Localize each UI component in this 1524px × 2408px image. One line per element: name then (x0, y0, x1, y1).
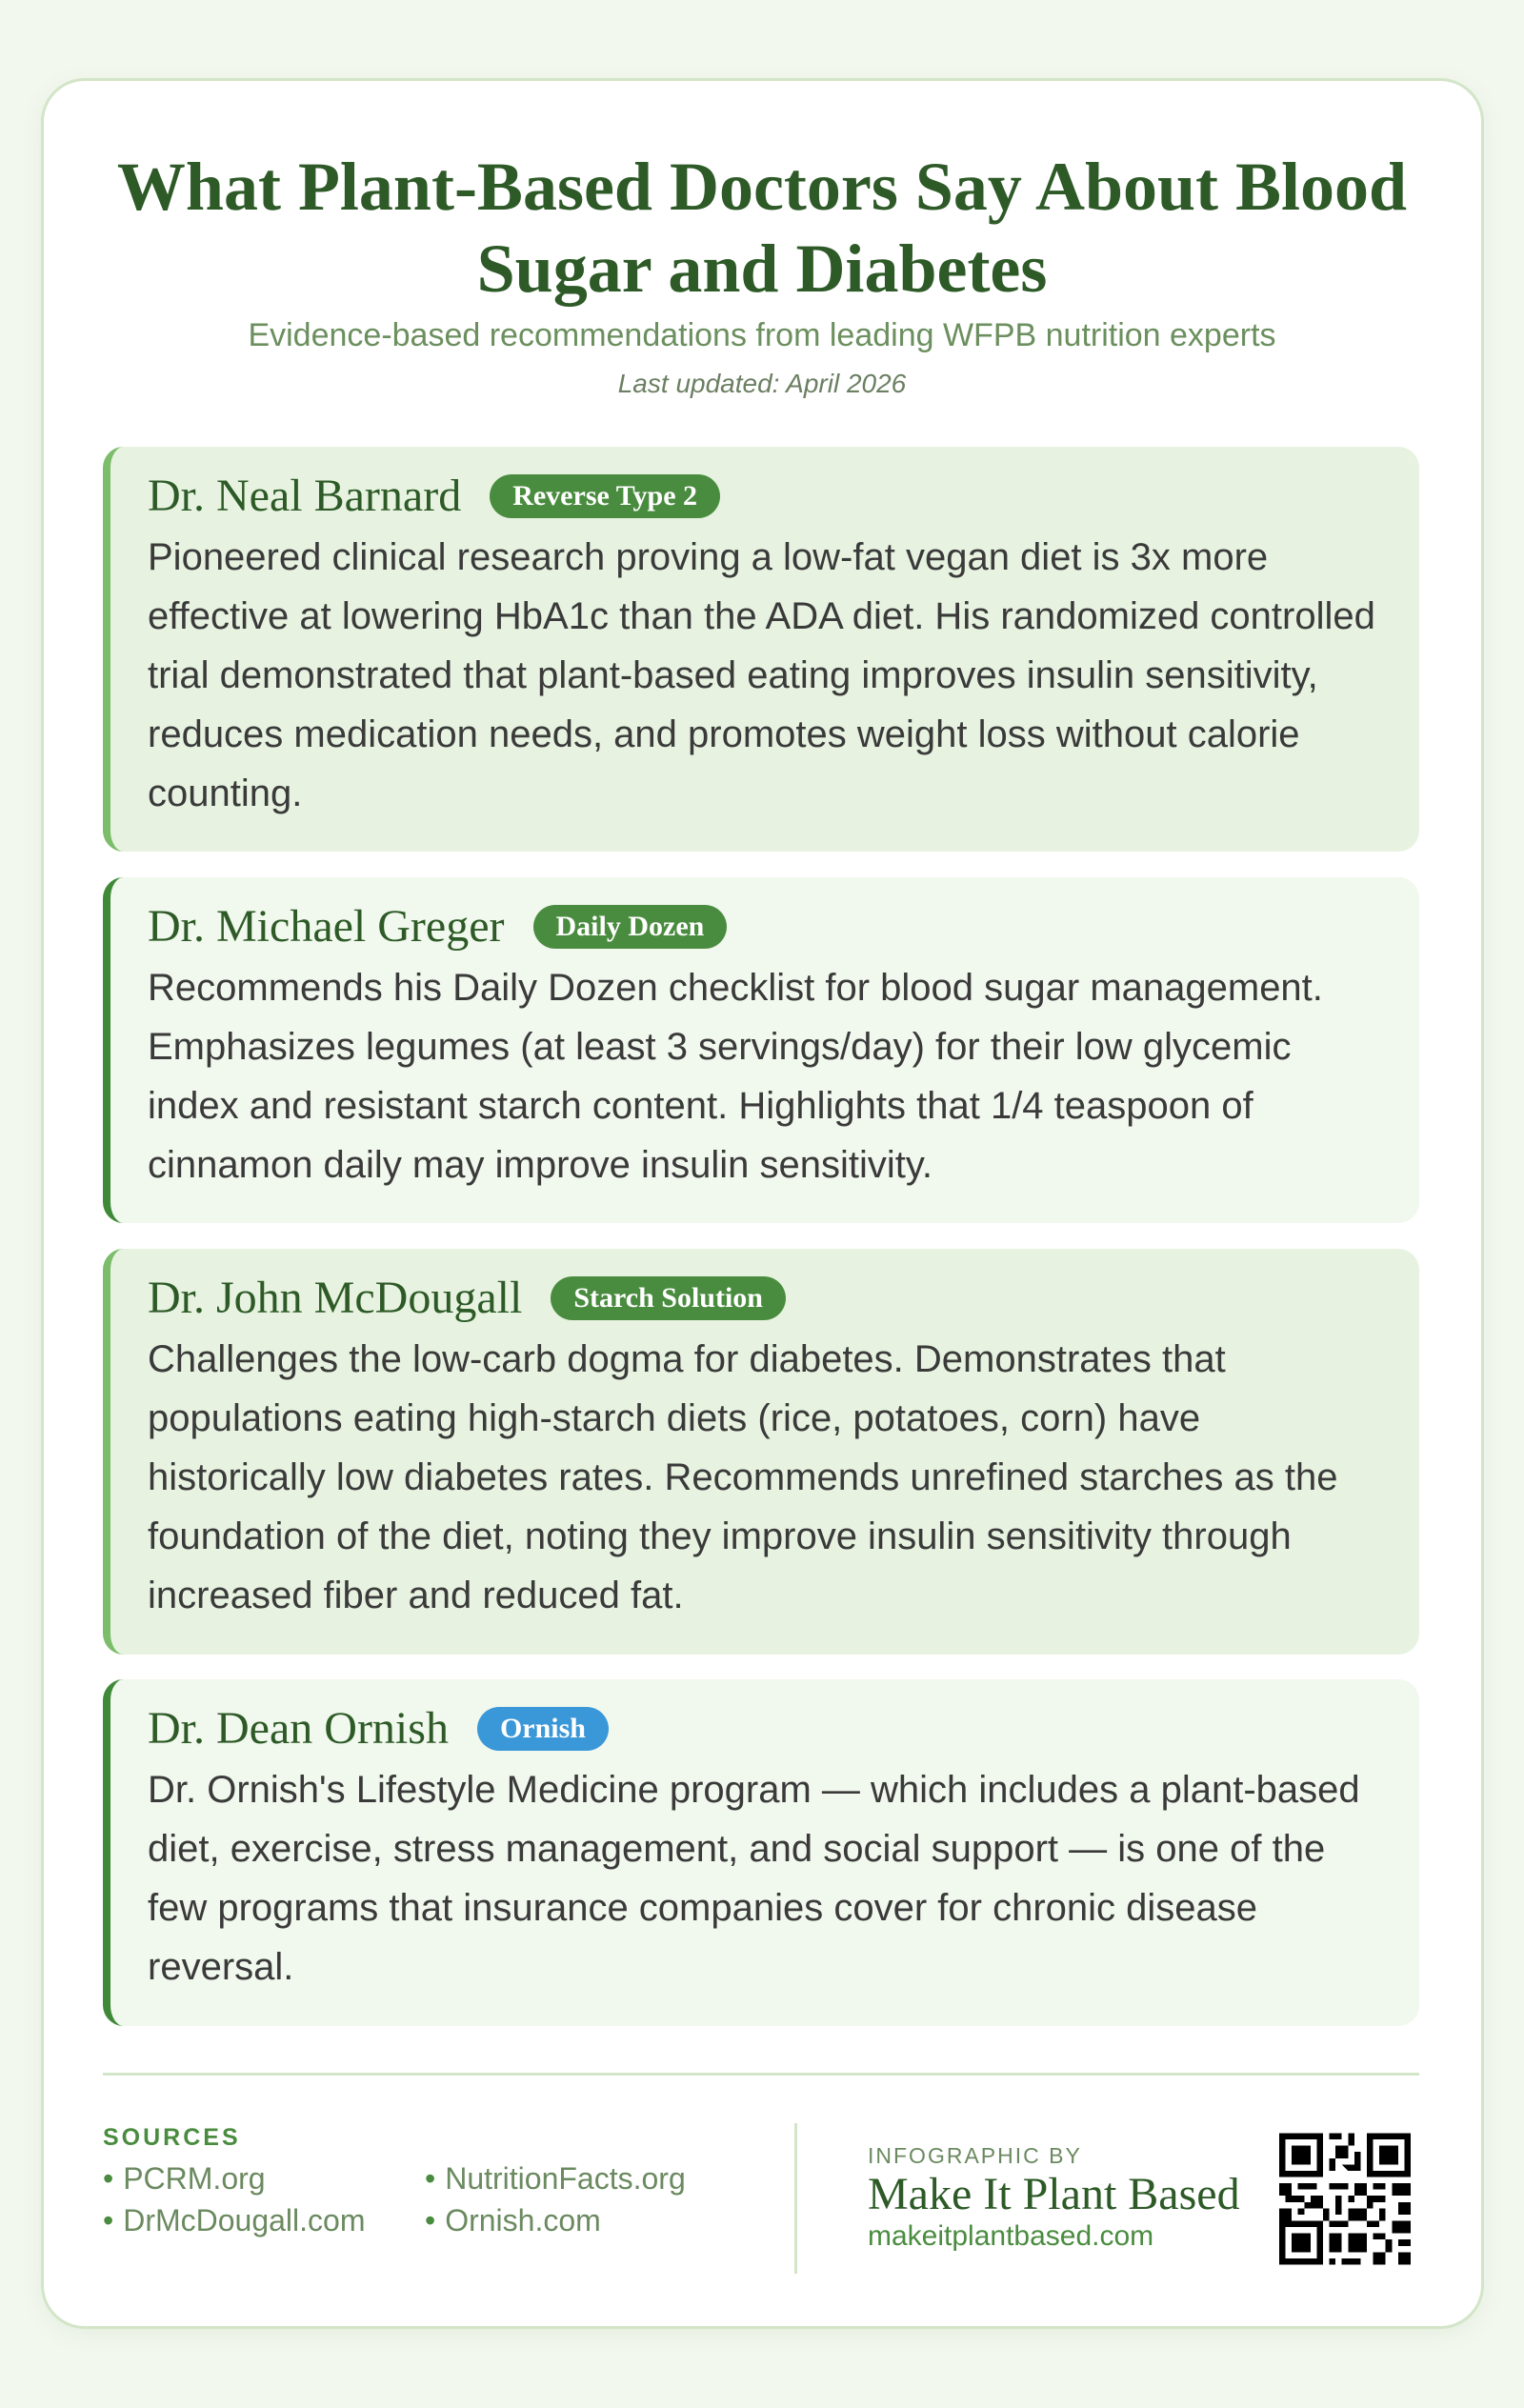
sources list: • Ornish.com (425, 2203, 601, 2237)
credit: Make It Plant Based (868, 2169, 1240, 2219)
name: Ornish: Ornish (500, 1713, 586, 1744)
panel: Dean Ornish (103, 1679, 1419, 2026)
sources list: • DrMcDougall.com (103, 2203, 365, 2237)
icon: QR code (1279, 2134, 1411, 2265)
credit: INFOGRAPHIC BY (868, 2143, 1082, 2168)
text: Barnard: Pioneered clinical research proving a low-fat vegan diet is 3x more effective at lowering HbA1c than the ADA diet. His randomized controlled trial demonstrated that plant-based eating improves insulin sensitivity, reduces medication needs, and promotes weight loss without calorie counting. (148, 536, 1375, 814)
sources list: • PCRM.org (103, 2161, 266, 2196)
text: McDougall: Challenges the low-carb dogma for diabetes. Demonstrates that populations eating high-starch diets (rice, potatoes, corn) have historically low diabetes rates. Recommends unrefined starches as the foundation of the diet, noting they improve insulin sensitivity through increased fiber and reduced fat. (148, 1338, 1337, 1616)
sources heading: SOURCES (103, 2124, 241, 2151)
sources list: • NutritionFacts.org (425, 2161, 686, 2196)
name: McDougall (148, 1273, 786, 1323)
panel: John McDougall (103, 1249, 1419, 1655)
title: Sugar and Diabetes (477, 231, 1047, 307)
credit (868, 2143, 1240, 2252)
credit: makeitplantbased.com (868, 2220, 1153, 2252)
name: Barnard (148, 471, 720, 521)
sources list (103, 2161, 686, 2237)
date: Last updated: April 2026 (618, 369, 906, 398)
name: Greger (148, 901, 727, 952)
text: Ornish: Dr. Ornish's Lifestyle Medicine program — which includes a plant-based diet, exercise, stress management, and social support — is one of the few programs that insurance companies cover for chronic disease reversal. (148, 1769, 1360, 1988)
name: Greger: Dr. Michael Greger (148, 901, 505, 952)
title (117, 149, 1407, 307)
name: McDougall: Dr. John McDougall (148, 1273, 522, 1323)
text: Greger: Recommends his Daily Dozen checklist for blood sugar management. Emphasizes legumes (at least 3 servings/day) for their low glycemic index and resistant starch content. Highlights that 1/4 teaspoon of cinnamon daily may improve insulin sensitivity. (148, 967, 1323, 1186)
name: Barnard: Reverse Type 2 (512, 480, 697, 512)
title: What Plant-Based Doctors Say About Blood (117, 149, 1407, 225)
panel: Neal Barnard (103, 447, 1419, 852)
name: Ornish (148, 1703, 609, 1754)
name: Greger: Daily Dozen (556, 911, 704, 942)
name: McDougall: Starch Solution (573, 1282, 763, 1314)
subtitle: Evidence-based recommendations from leading WFPB nutrition experts (248, 317, 1276, 353)
name: Ornish: Dr. Dean Ornish (148, 1703, 449, 1754)
name: Barnard: Dr. Neal Barnard (148, 471, 461, 521)
panel: Michael Greger (103, 877, 1419, 1223)
